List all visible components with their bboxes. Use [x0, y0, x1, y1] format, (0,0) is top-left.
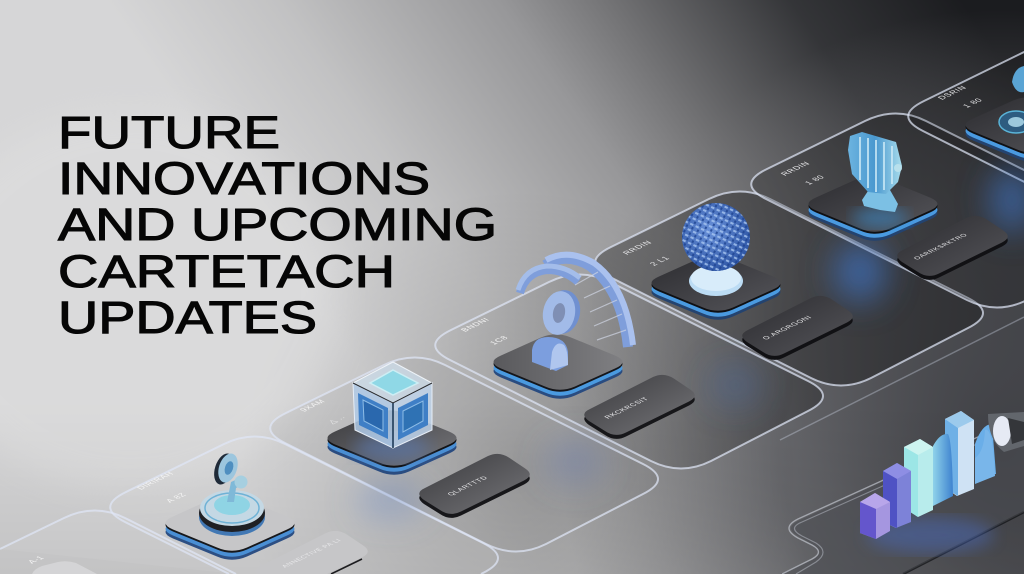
platform: step 3: [328, 410, 456, 475]
icon: dial on ring base: [199, 451, 265, 536]
button: step 3: QLARTTTD: [447, 475, 490, 497]
panel: step 7: [908, 46, 1024, 240]
bar 5: [945, 411, 974, 496]
device at chart edge: [988, 412, 1024, 452]
button: step 3: [419, 454, 530, 518]
button: step 2: ANNECTIVE PA LI: [281, 538, 343, 569]
bar 1: [860, 493, 890, 539]
panel: step 3: [270, 358, 658, 552]
floor lines: [780, 317, 1024, 574]
title: [58, 107, 497, 343]
small panel labels: 9XAM: [298, 398, 328, 413]
platform: step 7: [966, 97, 1024, 162]
small panel labels: BNDNI: [459, 317, 492, 333]
button: step 2: [255, 531, 368, 574]
button: step 5: [742, 296, 853, 360]
small panel labels: A 8Z: [164, 492, 189, 504]
small panel labels: RRDIN: [779, 160, 812, 177]
title: INNOVATIONS: [58, 153, 430, 204]
platform: step 2: [166, 495, 294, 560]
small panel labels: 1 80: [961, 97, 985, 109]
button: step 6: OARRKSRKTRO: [913, 233, 970, 261]
icon: glass chip cube: [353, 362, 432, 462]
icon: partial object on step 7: [999, 66, 1024, 133]
panel: step 6: [751, 114, 1024, 308]
platform: step 5: [652, 255, 780, 320]
button: step 5: O.ARGRGONI: [762, 315, 814, 341]
button: step 4: RKCKRCSIT: [604, 397, 651, 420]
small panel labels: 1C8: [488, 335, 511, 346]
small panel labels: △ ..: [326, 414, 347, 425]
title: CARTETACH: [58, 246, 395, 297]
small panel labels: RRDIN: [621, 239, 654, 256]
small panel labels: [26, 85, 985, 565]
bar 4: [933, 434, 953, 506]
platform: step 6: [808, 176, 938, 241]
bar 2: [883, 463, 911, 528]
small panel labels: A-1: [26, 555, 47, 565]
icon: textured sphere on pedestal: [680, 200, 752, 296]
button: step 4: [584, 375, 695, 439]
small panel labels: DIRIRAH: [135, 471, 176, 491]
panel: step 4: [435, 274, 823, 468]
small panel labels: DSRIN: [936, 85, 969, 101]
bar 3: [904, 439, 933, 517]
title: AND UPCOMING: [58, 199, 497, 250]
button: step 6: [897, 216, 1008, 280]
icon: arches and ring: [518, 255, 633, 371]
panel: step 1: [0, 510, 236, 574]
small panel labels: 1 80: [803, 174, 827, 186]
blue glow reflections: [356, 168, 1024, 518]
panel: chart base: [780, 416, 1024, 574]
bar 6: [975, 424, 996, 484]
title: UPDATES: [58, 292, 317, 343]
panel: step 5: [595, 192, 983, 386]
button: step 1: [32, 561, 97, 574]
title: FUTURE: [58, 107, 280, 158]
platform: step 4: [494, 334, 622, 399]
bar chart: [860, 411, 1024, 553]
panel: step 2: [110, 436, 498, 574]
icon: ribbed blue sculpture: [848, 132, 908, 228]
small panel labels: 2 L1: [648, 255, 672, 267]
